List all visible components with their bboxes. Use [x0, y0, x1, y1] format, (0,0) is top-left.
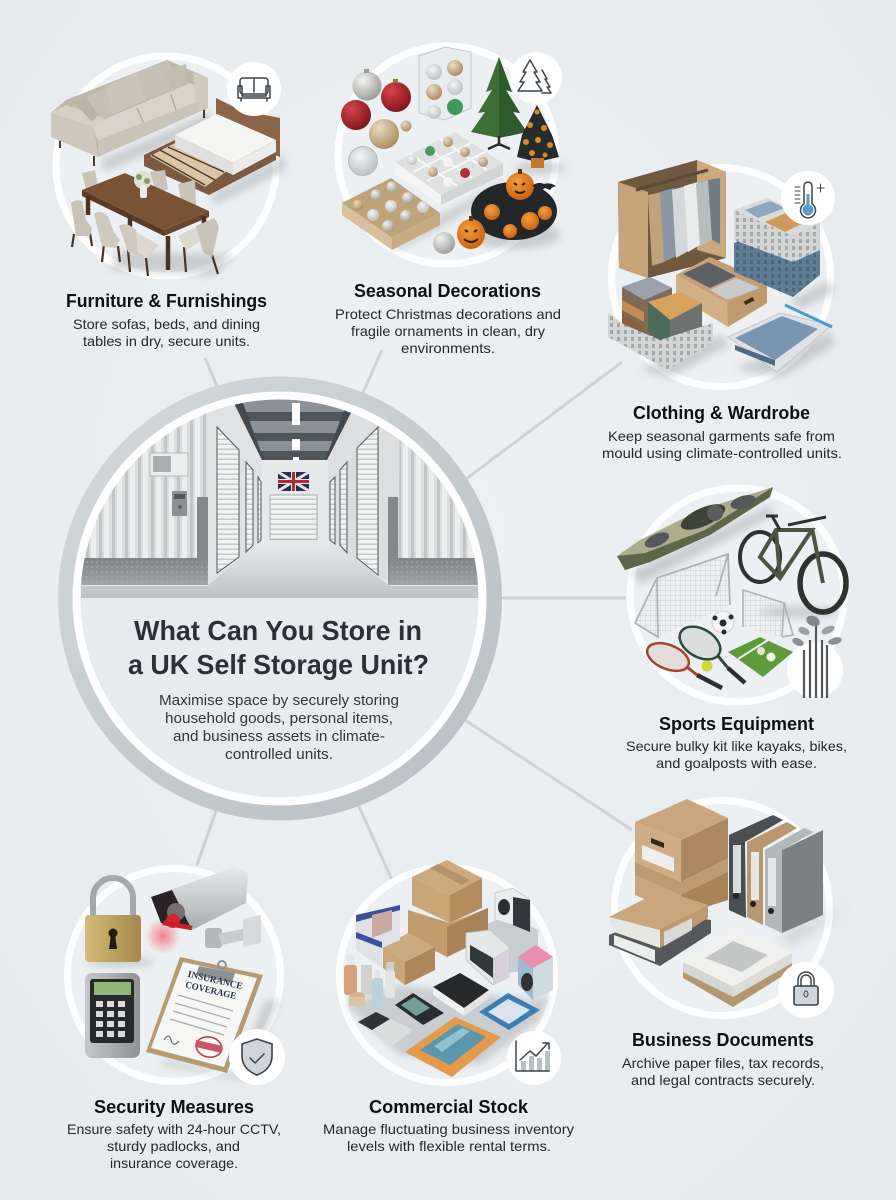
shadows	[345, 985, 550, 1065]
description	[626, 738, 847, 771]
ornaments	[341, 69, 412, 176]
cctv camera	[151, 867, 261, 948]
description: and goalposts with ease.	[656, 755, 817, 771]
bed	[144, 98, 280, 195]
crates	[734, 198, 820, 297]
title: Security Measures	[94, 1097, 254, 1117]
description	[335, 306, 561, 356]
shadows	[100, 112, 285, 275]
heading: What Can You Store in	[134, 615, 422, 646]
description: Archive paper files, tax records,	[622, 1055, 824, 1071]
description: Store sofas, beds, and dining	[73, 316, 260, 332]
intro text: household goods, personal items,	[165, 710, 393, 727]
description: Protect Christmas decorations and	[335, 306, 561, 322]
heading	[128, 615, 429, 680]
description	[67, 1121, 281, 1171]
title: Commercial Stock	[369, 1097, 529, 1117]
hub disc	[76, 396, 482, 802]
icon: sofa badge	[227, 62, 281, 116]
description: sturdy padlocks, and	[107, 1138, 240, 1154]
description: Ensure safety with 24-hour CCTV,	[67, 1121, 281, 1137]
description: mould using climate-controlled units.	[602, 445, 842, 461]
tennis ball	[702, 660, 712, 672]
intro text	[159, 692, 399, 763]
icon: chart badge	[507, 1031, 561, 1085]
small goal	[743, 590, 793, 637]
panel: furniture	[51, 56, 285, 349]
shutters left	[217, 427, 239, 573]
photo: storage corridor	[78, 395, 482, 598]
headphone box	[495, 888, 530, 932]
description: environments.	[401, 340, 495, 356]
intro text: controlled units.	[225, 746, 333, 763]
icon: trees badge	[510, 52, 562, 104]
title: Clothing & Wardrobe	[633, 403, 810, 423]
description: tables in dry, secure units.	[83, 333, 250, 349]
halloween tree	[517, 105, 559, 168]
chairs front	[71, 200, 218, 258]
blue and white box	[356, 905, 400, 968]
archive boxes	[635, 799, 728, 915]
outer grey ring	[66, 384, 494, 812]
description: fragile ornaments in clean, dry	[351, 323, 545, 339]
shutters right	[357, 427, 378, 575]
description	[622, 1055, 824, 1088]
keypad panel	[172, 491, 187, 516]
kraft ornament tray	[342, 178, 440, 250]
blue box	[479, 993, 540, 1030]
clipboard	[146, 957, 263, 1073]
chairs back	[82, 170, 196, 205]
large goal	[635, 554, 730, 637]
clipboard heading: INSURANCE	[187, 970, 243, 992]
panel: clothing	[602, 160, 842, 461]
cosmetics	[344, 955, 395, 1008]
paper stack	[683, 928, 792, 1007]
shadows	[345, 162, 566, 252]
sofa	[51, 60, 208, 166]
panel: central hub	[66, 384, 494, 812]
cardboard box	[676, 257, 767, 327]
description: Keep seasonal garments safe from	[608, 428, 835, 444]
description	[602, 428, 842, 461]
white ornament tray	[395, 132, 503, 205]
football	[712, 611, 734, 634]
icon: padlock badge	[778, 962, 834, 1018]
christmas tree	[471, 57, 527, 149]
description	[73, 316, 260, 349]
title: Business Documents	[632, 1030, 814, 1050]
intro text: and business assets in climate-	[173, 728, 385, 745]
turf	[728, 637, 793, 677]
shadows	[86, 957, 280, 1080]
lying folders	[609, 890, 711, 966]
description: Manage fluctuating business inventory	[323, 1121, 574, 1137]
shadows	[640, 280, 835, 378]
dining table	[71, 170, 218, 276]
heading: a UK Self Storage Unit?	[128, 649, 429, 680]
grey carton	[484, 915, 538, 975]
description	[323, 1121, 574, 1154]
folded stacks and basket	[608, 277, 713, 370]
ceiling	[234, 400, 351, 460]
AC unit	[150, 453, 188, 476]
kick plates	[78, 558, 208, 585]
title: Seasonal Decorations	[354, 281, 541, 301]
pumpkins and wreath	[433, 169, 557, 254]
clipboard heading: COVERAGE	[184, 981, 237, 1002]
binders	[729, 815, 823, 933]
small boxes	[358, 1012, 413, 1047]
keypad	[85, 973, 140, 1058]
description: levels with flexible rental terms.	[347, 1138, 551, 1154]
description: and legal contracts securely.	[631, 1072, 815, 1088]
title: Furniture & Furnishings	[66, 291, 267, 311]
orange package	[405, 1017, 501, 1077]
description: insurance coverage.	[110, 1155, 238, 1171]
icon: shield badge	[229, 1029, 285, 1085]
shadows	[630, 505, 840, 618]
panel: seasonal	[335, 46, 566, 356]
floor	[81, 540, 478, 598]
vacuum bag	[728, 305, 832, 372]
title: Sports Equipment	[659, 714, 814, 734]
wardrobe box	[618, 160, 726, 278]
panel: security	[67, 867, 285, 1171]
handheld device	[395, 993, 444, 1025]
padlock	[85, 878, 141, 962]
stacked cartons	[383, 860, 488, 985]
bicycle	[740, 516, 846, 612]
kayak	[617, 487, 773, 570]
red glow	[145, 918, 181, 954]
intro text: Maximise space by securely storing	[159, 692, 399, 709]
connectors to category panels	[197, 350, 632, 880]
golf clubs	[791, 614, 843, 698]
microwave box	[466, 930, 509, 985]
tablet box	[433, 973, 489, 1016]
end wall, flag and door	[293, 460, 328, 508]
pink box	[518, 945, 553, 1000]
clipboard heading	[184, 970, 243, 1003]
icon: thermometer badge	[781, 171, 835, 225]
rackets	[643, 620, 745, 688]
description: Secure bulky kit like kayaks, bikes,	[626, 738, 847, 754]
panel: commercial stock	[323, 860, 574, 1154]
panel: business documents	[609, 799, 845, 1088]
legs of front chairs	[72, 233, 218, 276]
panel: sports	[617, 487, 847, 771]
clear ornament box	[419, 47, 471, 120]
